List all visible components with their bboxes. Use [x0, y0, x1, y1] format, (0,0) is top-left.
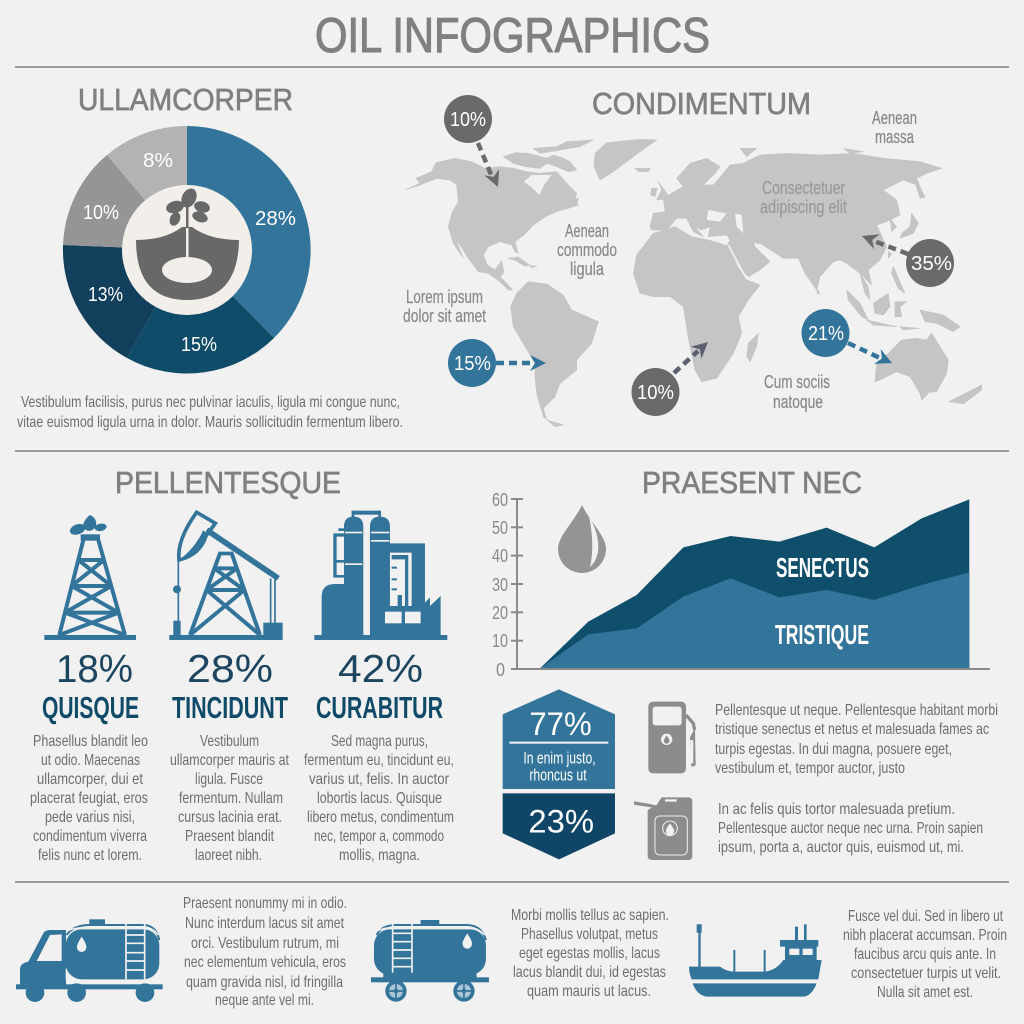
text block: curabitur: varius ut, felis. In auctor [309, 771, 450, 788]
area chart: 10 [492, 631, 508, 651]
text block: fuel pump [715, 702, 998, 777]
callout: 35% asia: 35% [911, 253, 952, 275]
text block: tincidunt: Vestibulum [200, 733, 259, 750]
donut chart: 8% [143, 150, 173, 172]
icon: tanker truck [16, 919, 163, 1002]
text block: curabitur [304, 733, 454, 864]
hexagon stat: 77% [529, 706, 592, 742]
text block: rail car: lacus blandit dui, id egestas [513, 964, 666, 981]
text block: rail car: Morbi mollis tellus ac sapien. [511, 907, 669, 924]
stat: 18% quisque: 18% [56, 648, 133, 691]
text block: truck: nec elementum vehicula, eros [184, 954, 346, 971]
area chart [492, 490, 990, 680]
americas [405, 139, 657, 427]
map label: aenean commodo ligula: ligula [570, 259, 605, 279]
callout: 21% australia [802, 309, 895, 370]
heading: condimentum: CONDIMENTUM [592, 86, 811, 121]
text block: jerry can: ipsum, porta a, auctor quis, euismod ut, mi. [718, 839, 964, 856]
stat: 28% tincidunt: 28% [187, 648, 273, 691]
text block: tincidunt [170, 733, 289, 864]
hexagon stat: In enim justo, [523, 748, 596, 767]
map label: cum sociis: Cum sociis [764, 372, 830, 392]
text block: quisque: felis nunc et lorem. [38, 847, 142, 864]
donut chart: 10% [83, 202, 119, 224]
area chart: TRISTIQUE [775, 619, 869, 650]
hexagon stat: rhoncus ut [529, 766, 587, 785]
icon: pumpjack [169, 512, 283, 640]
area chart: 50 [492, 518, 508, 538]
icon: fuel pump [648, 702, 696, 773]
text block: rail car: quam mauris ut lacus. [527, 983, 651, 1000]
text block: fuel pump: turpis egestas. In dui magna, posuere eget, [715, 741, 952, 758]
area chart: SENECTUS [776, 552, 869, 583]
donut chart: 28% [255, 208, 296, 230]
map label: aenean commodo ligula: commodo [557, 240, 617, 260]
map label: consectetuer: Consectetuer [762, 178, 845, 198]
callout: 10% north america [444, 95, 505, 190]
text block: quisque: pede varius nisi, [45, 809, 135, 826]
text block: ship: Nulla sit amet est. [877, 984, 973, 1001]
text block: truck [183, 895, 347, 1009]
text block: truck: neque ante vel mi. [215, 992, 314, 1009]
heading: ullamcorper: ULLAMCORPER [78, 82, 293, 117]
stat: 42% curabitur: 42% [338, 648, 423, 691]
panel: ullamcorper donut [17, 82, 403, 431]
donut chart [63, 126, 311, 374]
text block: quisque [30, 733, 148, 864]
icon: rail tank car [371, 920, 489, 1002]
panel: pellentesque [30, 465, 454, 864]
text block: quisque: Phasellus blandit leo [33, 733, 148, 750]
panel: praesent nec [492, 465, 998, 860]
area chart: 60 [492, 490, 508, 510]
text block: tincidunt: laoreet nibh. [195, 847, 262, 864]
map label: consectetuer: adipiscing elit [760, 197, 847, 217]
text block: quisque: ullamcorper, dui et [37, 771, 143, 788]
text block: tincidunt: cursus lacinia erat. [178, 809, 282, 826]
map label: aenean massa [872, 108, 917, 147]
text block: curabitur: Sed magna purus, [331, 733, 428, 750]
map label: consectetuer [760, 178, 847, 217]
text block: quisque: placerat feugiat, eros [30, 790, 148, 807]
text block: donut caption [17, 394, 403, 431]
area chart: 40 [492, 546, 508, 566]
text block: fuel pump: vestibulum et, tempor auctor, justo [715, 760, 905, 777]
hexagon stat: 23% [528, 804, 594, 840]
text block: rail car: Phasellus volutpat, metus [521, 926, 658, 943]
callout: 10% africa: 10% [637, 382, 674, 404]
callout: 10% north america: 10% [450, 109, 486, 131]
area chart: 0 [496, 660, 505, 680]
text block: truck: Nunc interdum lacus sit amet [185, 915, 344, 932]
text block: rail car [511, 907, 669, 1000]
text block: curabitur: lobortis lacus. Quisque [317, 790, 442, 807]
text block: truck: quam gravida nisl, id fringilla [186, 974, 343, 991]
stat: 42% curabitur [316, 648, 443, 725]
map label: lorem ipsum [403, 287, 486, 326]
icon: jerry can [634, 797, 692, 860]
callout: 10% africa [632, 336, 713, 416]
stat: 28% tincidunt: TINCIDUNT [172, 690, 288, 725]
text block: truck: orci. Vestibulum rutrum, mi [191, 935, 339, 952]
icon: tanker ship [689, 924, 822, 997]
callout: 15% south america: 15% [454, 353, 491, 375]
map label: aenean commodo ligula [557, 221, 617, 279]
text block: rail car: eget egestas mollis, lacus [519, 945, 660, 962]
text block: curabitur: nec, tempor a, commodo [314, 828, 444, 845]
stat: 18% quisque [42, 648, 139, 725]
panel: condimentum world map [403, 86, 982, 427]
text block: jerry can: In ac felis quis tortor malesuada pretium. [718, 801, 955, 818]
text block: curabitur: fermentum eu, tincidunt eu, [304, 752, 454, 769]
map label: lorem ipsum: dolor sit amet [403, 306, 486, 326]
text block: quisque: condimentum viverra [33, 828, 147, 845]
map label: aenean massa: massa [875, 127, 915, 147]
stat: 18% quisque: QUISQUE [42, 690, 139, 725]
text block: quisque: ut odio. Maecenas [41, 752, 140, 769]
text block: ship [843, 908, 1007, 1001]
title: OIL INFOGRAPHICS [315, 9, 710, 63]
hexagon stat [503, 689, 615, 859]
text block: tincidunt: ligula. Fusce [195, 771, 263, 788]
text block: tincidunt: Praesent blandit [185, 828, 274, 845]
callout: 35% asia [859, 229, 954, 287]
heading: praesent nec: PRAESENT NEC [642, 465, 862, 500]
icon: refinery [314, 511, 447, 640]
africa eurasia oceania [633, 148, 982, 404]
heading: pellentesque: PELLENTESQUE [115, 465, 341, 500]
icon: oil well gusher [136, 186, 239, 300]
map label: cum sociis: natoque [773, 392, 823, 412]
text block: donut caption: Vestibulum facilisis, purus nec pulvinar iaculis, ligula mi congue nunc, [21, 394, 400, 411]
icon: oil drop [558, 505, 606, 573]
panel: transport [16, 895, 1007, 1009]
text block: jerry can [718, 801, 983, 856]
area chart: 20 [492, 603, 508, 623]
callout: 21% australia: 21% [808, 323, 844, 345]
text block: curabitur: libero metus, condimentum [307, 809, 454, 826]
stat: 28% tincidunt [172, 648, 288, 725]
text block: truck: Praesent nonummy mi in odio. [183, 895, 347, 912]
stat: 42% curabitur: CURABITUR [316, 690, 443, 725]
map label: aenean commodo ligula: Aenean [565, 221, 609, 241]
map label: lorem ipsum: Lorem ipsum [406, 287, 483, 307]
area chart: 30 [492, 575, 508, 595]
callout: 15% south america [448, 339, 546, 387]
text block: donut caption: vitae euismod ligula urna in dolor. Mauris sollicitudin fermentum libero. [17, 414, 403, 431]
icon: oil derrick [44, 515, 136, 640]
donut chart: 13% [88, 284, 123, 306]
map label: aenean massa: Aenean [872, 108, 917, 128]
text block: tincidunt: ullamcorper mauris at [170, 752, 289, 769]
map label: cum sociis [764, 372, 830, 412]
donut chart: 15% [181, 334, 217, 356]
text block: tincidunt: fermentum. Nullam [179, 790, 283, 807]
world map [405, 139, 982, 427]
text block: curabitur: mollis, magna. [339, 847, 420, 864]
